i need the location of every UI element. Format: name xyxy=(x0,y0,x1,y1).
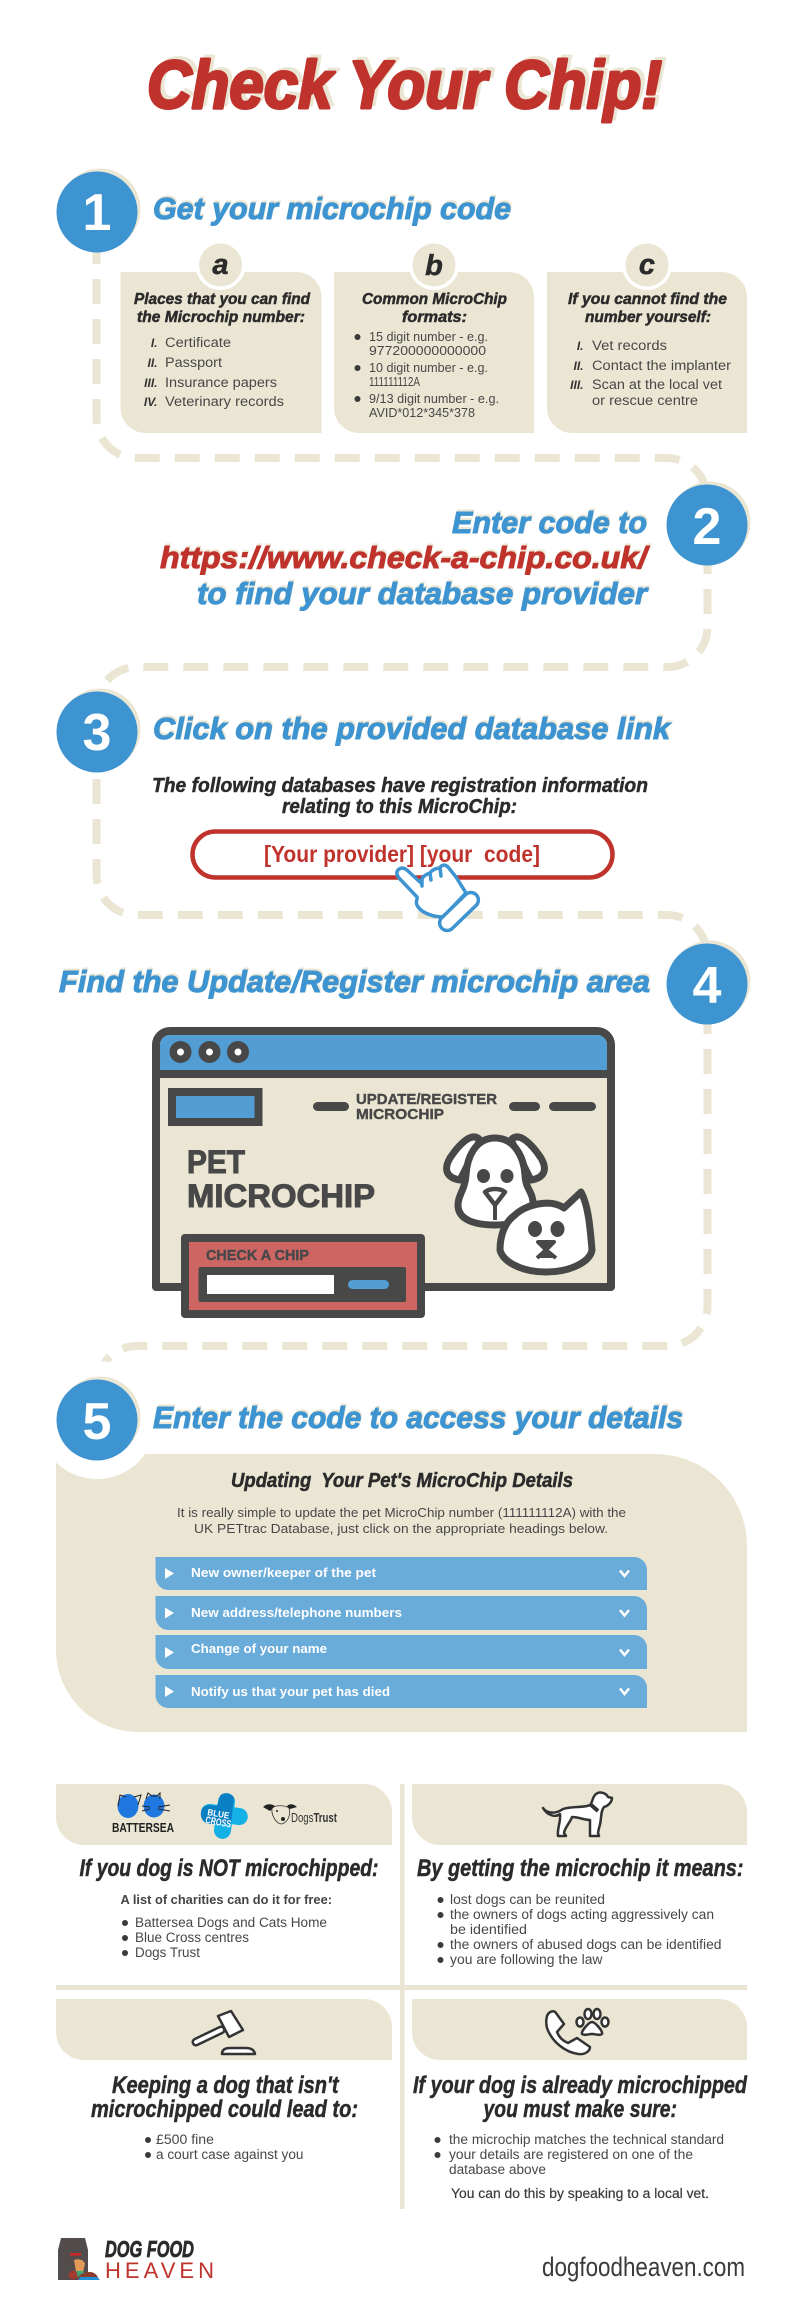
panel: already microchipped: database above xyxy=(449,2162,546,2177)
accordion row 1: New owner/keeper of the pet xyxy=(191,1565,377,1580)
step 3 badge: 3 xyxy=(83,704,111,762)
icon: Blue Cross logo: BLUE xyxy=(207,1807,230,1821)
icon: Dogs Trust logo: DogsTrust xyxy=(291,1810,337,1825)
check a chip widget: CHECK A CHIP xyxy=(206,1247,309,1264)
panel: card b: AVID*012*345*378 xyxy=(369,405,475,420)
footer logo: HEAVEN xyxy=(105,2258,214,2283)
panel: consequences: a court case against you xyxy=(156,2147,304,2162)
panel: card c: Scan at the local vet xyxy=(592,377,722,392)
accordion row 2 xyxy=(156,1596,647,1630)
step 2 badge: 2 xyxy=(693,498,721,556)
panel: card b: 9/13 digit number - e.g. xyxy=(369,391,499,406)
panel: card a: Places that you can find xyxy=(134,291,311,308)
step 1 heading: Get your microchip code xyxy=(153,191,511,226)
panel: update details xyxy=(56,1454,747,1732)
provider link button xyxy=(192,832,612,878)
icon: Battersea logo: BATTERSEA xyxy=(112,1820,174,1835)
panel: card a: III. xyxy=(144,376,158,390)
panel: consequences: £500 fine xyxy=(156,2132,214,2147)
browser window illustration xyxy=(156,1031,611,1314)
step 5 badge xyxy=(38,1361,156,1479)
panel: card c: c xyxy=(639,249,655,281)
panel: not microchipped: Battersea Dogs and Cats Home xyxy=(135,1915,327,1930)
step 2 heading: https://www.check-a-chip.co.uk/ xyxy=(160,540,651,575)
panel: not microchipped xyxy=(56,1784,392,1960)
browser window illustration: PET xyxy=(187,1144,245,1180)
panel: consequences: Keeping a dog that isn't xyxy=(112,2072,339,2099)
panel: already microchipped: your details are registered on one of the xyxy=(449,2147,693,2162)
title: Check Your Chip! xyxy=(147,47,662,123)
step 2 heading: Enter code to xyxy=(452,505,647,540)
panel: card b: 111111112A xyxy=(369,374,420,389)
panel: card a: Certificate xyxy=(165,335,231,350)
step 4 badge: 4 xyxy=(693,957,722,1015)
step 5 badge: 5 xyxy=(83,1393,111,1451)
panel: card c xyxy=(547,240,747,433)
step 4 badge xyxy=(666,940,750,1024)
panel: card b: 10 digit number - e.g. xyxy=(369,360,488,375)
footer logo xyxy=(58,2236,214,2283)
panel: card b: 977200000000000 xyxy=(369,343,486,358)
step 1 badge xyxy=(56,168,140,252)
step 4 heading: Find the Update/Register microchip area xyxy=(59,964,650,999)
dashed route from step 4 to step 5 xyxy=(97,1024,708,1386)
panel: already microchipped: you must make sure: xyxy=(483,2096,677,2123)
panel: card c: II. xyxy=(573,359,584,373)
step 2 heading: to find your database provider xyxy=(197,576,649,611)
footer website: dogfoodheaven.com xyxy=(542,2252,745,2282)
panel: consequences: microchipped could lead to: xyxy=(91,2096,358,2123)
panel: card a: Insurance papers xyxy=(165,375,277,390)
step 2 heading xyxy=(160,505,651,611)
panel: card c: If you cannot find the xyxy=(568,291,727,308)
dashed route from step 2 to step 3 xyxy=(97,565,708,707)
panel: card a: I. xyxy=(151,336,158,350)
step 1 badge: 1 xyxy=(83,184,111,242)
step 3 text block: The following databases have registration information xyxy=(152,775,648,797)
panel: already microchipped: You can do this by speaking to a local vet. xyxy=(451,2186,709,2201)
panel: already microchipped xyxy=(412,1999,748,2201)
panel: already microchipped: the microchip matches the technical standard xyxy=(449,2132,724,2147)
step 2 badge xyxy=(666,482,750,566)
panel: not microchipped: Dogs Trust xyxy=(135,1945,200,1960)
panel: benefits of microchip: the owners of abused dogs can be identified xyxy=(450,1937,722,1952)
panel: benefits of microchip: you are following the law xyxy=(450,1952,603,1967)
panel: card b: b xyxy=(425,250,443,282)
icon: phone and paw xyxy=(546,2009,608,2054)
icon: dog head xyxy=(447,1137,544,1225)
check a chip widget xyxy=(185,1238,421,1314)
icon: gavel xyxy=(196,2011,255,2054)
panel: update details: UK PETtrac Database, just click on the appropriate headings below. xyxy=(194,1521,608,1536)
accordion row 2: New address/telephone numbers xyxy=(191,1605,402,1620)
panel: benefits of microchip xyxy=(412,1784,747,1967)
icon: Dogs Trust logo xyxy=(263,1804,337,1825)
panel: card a: the Microchip number: xyxy=(137,309,305,326)
panel: card c: Contact the implanter xyxy=(592,358,732,373)
footer logo: DOG FOOD xyxy=(105,2236,194,2262)
panel: update details: It is really simple to update the pet MicroChip number (111111112A) with the xyxy=(177,1505,626,1520)
panel: card b: 15 digit number - e.g. xyxy=(369,329,488,344)
panel: card b: formats: xyxy=(402,309,467,326)
panel: card c: or rescue centre xyxy=(592,393,698,408)
icon: dog food bag xyxy=(58,2238,100,2280)
step 3 text block: relating to this MicroChip: xyxy=(282,796,517,818)
icon: Blue Cross logo xyxy=(200,1792,249,1840)
provider link button: [Your provider] [your code] xyxy=(264,841,540,867)
panel: update details: Updating Your Pet's MicroChip Details xyxy=(231,1470,573,1492)
browser window illustration: MICROCHIP xyxy=(187,1178,375,1214)
panel: card c: Vet records xyxy=(592,338,667,353)
panel: benefits of microchip: be identified xyxy=(450,1922,527,1937)
accordion row 3 xyxy=(156,1635,647,1669)
panel: not microchipped: If you dog is NOT microchipped: xyxy=(80,1855,378,1882)
browser window illustration: UPDATE/REGISTER xyxy=(356,1091,497,1108)
panel: card a: II. xyxy=(147,356,158,370)
step 5 heading: Enter the code to access your details xyxy=(153,1400,683,1435)
step 3 badge xyxy=(56,688,140,772)
accordion row 1 xyxy=(156,1557,647,1590)
icon: dog xyxy=(543,1793,612,1836)
step 3 text block xyxy=(152,775,648,818)
panel: card a: a xyxy=(212,249,229,281)
panel: not microchipped: A list of charities can do it for free: xyxy=(120,1892,332,1907)
panel: consequences xyxy=(56,1999,392,2162)
panel: not microchipped: Blue Cross centres xyxy=(135,1930,249,1945)
dashed route from step 1 to step 2 xyxy=(96,252,707,498)
panel: card c: III. xyxy=(570,378,584,392)
accordion row 4: Notify us that your pet has died xyxy=(191,1684,390,1699)
panel: card b xyxy=(334,240,534,433)
icon: Battersea logo xyxy=(112,1793,174,1835)
panel: card a: Passport xyxy=(165,355,222,370)
icon: Blue Cross logo: CROSS xyxy=(204,1815,232,1831)
dashed route from step 3 to step 4 xyxy=(96,772,707,955)
icon: cat head xyxy=(500,1192,592,1272)
panel: card c: I. xyxy=(577,339,584,353)
panel: card c: number yourself: xyxy=(585,309,711,326)
accordion row 4 xyxy=(156,1675,647,1708)
panel: card a: IV. xyxy=(144,395,158,409)
panel: benefits of microchip: By getting the microchip it means: xyxy=(417,1855,744,1882)
panel: card a: Veterinary records xyxy=(165,394,284,409)
panel: benefits of microchip: lost dogs can be reunited xyxy=(450,1892,605,1907)
panel: card a xyxy=(120,240,322,433)
panel: benefits of microchip: the owners of dogs acting aggressively can xyxy=(450,1907,714,1922)
step 3 heading: Click on the provided database link xyxy=(153,711,672,746)
panel: card b: Common MicroChip xyxy=(362,291,507,308)
browser window illustration: MICROCHIP xyxy=(356,1106,444,1123)
accordion row 3: Change of your name xyxy=(191,1641,327,1656)
icon: pointing hand xyxy=(397,865,481,934)
